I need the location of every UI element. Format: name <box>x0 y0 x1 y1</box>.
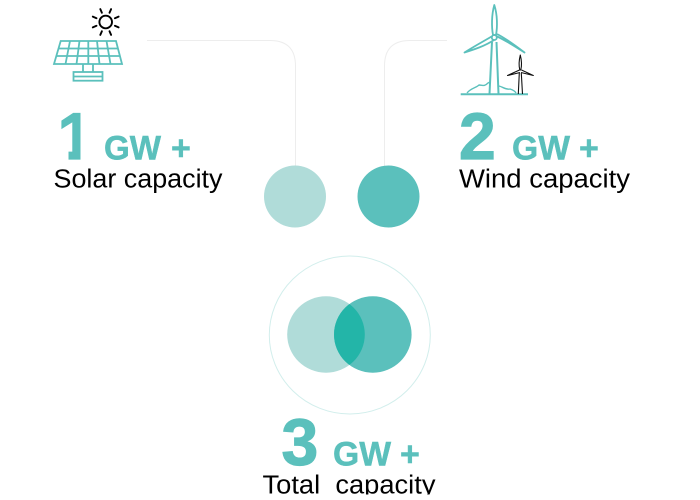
icon: sun <box>93 9 119 35</box>
connector: wind line <box>384 40 447 166</box>
total unit <box>333 436 420 474</box>
total label: Total capacity <box>262 472 436 500</box>
total number: 3 <box>282 405 318 479</box>
total unit: + <box>400 436 420 474</box>
solar unit: + <box>171 130 191 168</box>
wind unit <box>512 130 599 168</box>
icon: large wind turbine <box>461 5 528 94</box>
solar unit <box>104 130 191 168</box>
solar number: 1 <box>58 99 94 173</box>
wind label: Wind capacity <box>459 166 630 194</box>
connector: solar line <box>147 40 296 166</box>
wind circle <box>358 166 420 228</box>
wind unit: GW <box>512 130 571 168</box>
total unit: GW <box>333 436 392 474</box>
total outline circle <box>269 256 430 414</box>
wind unit: + <box>579 130 599 168</box>
solar unit: GW <box>104 130 162 168</box>
wind number: 2 <box>459 99 496 173</box>
solar circle <box>264 166 326 228</box>
venn diagram <box>287 296 412 373</box>
solar label: Solar capacity <box>54 166 223 194</box>
icon: small wind turbine <box>508 55 533 94</box>
icon: solar panel <box>54 41 122 81</box>
